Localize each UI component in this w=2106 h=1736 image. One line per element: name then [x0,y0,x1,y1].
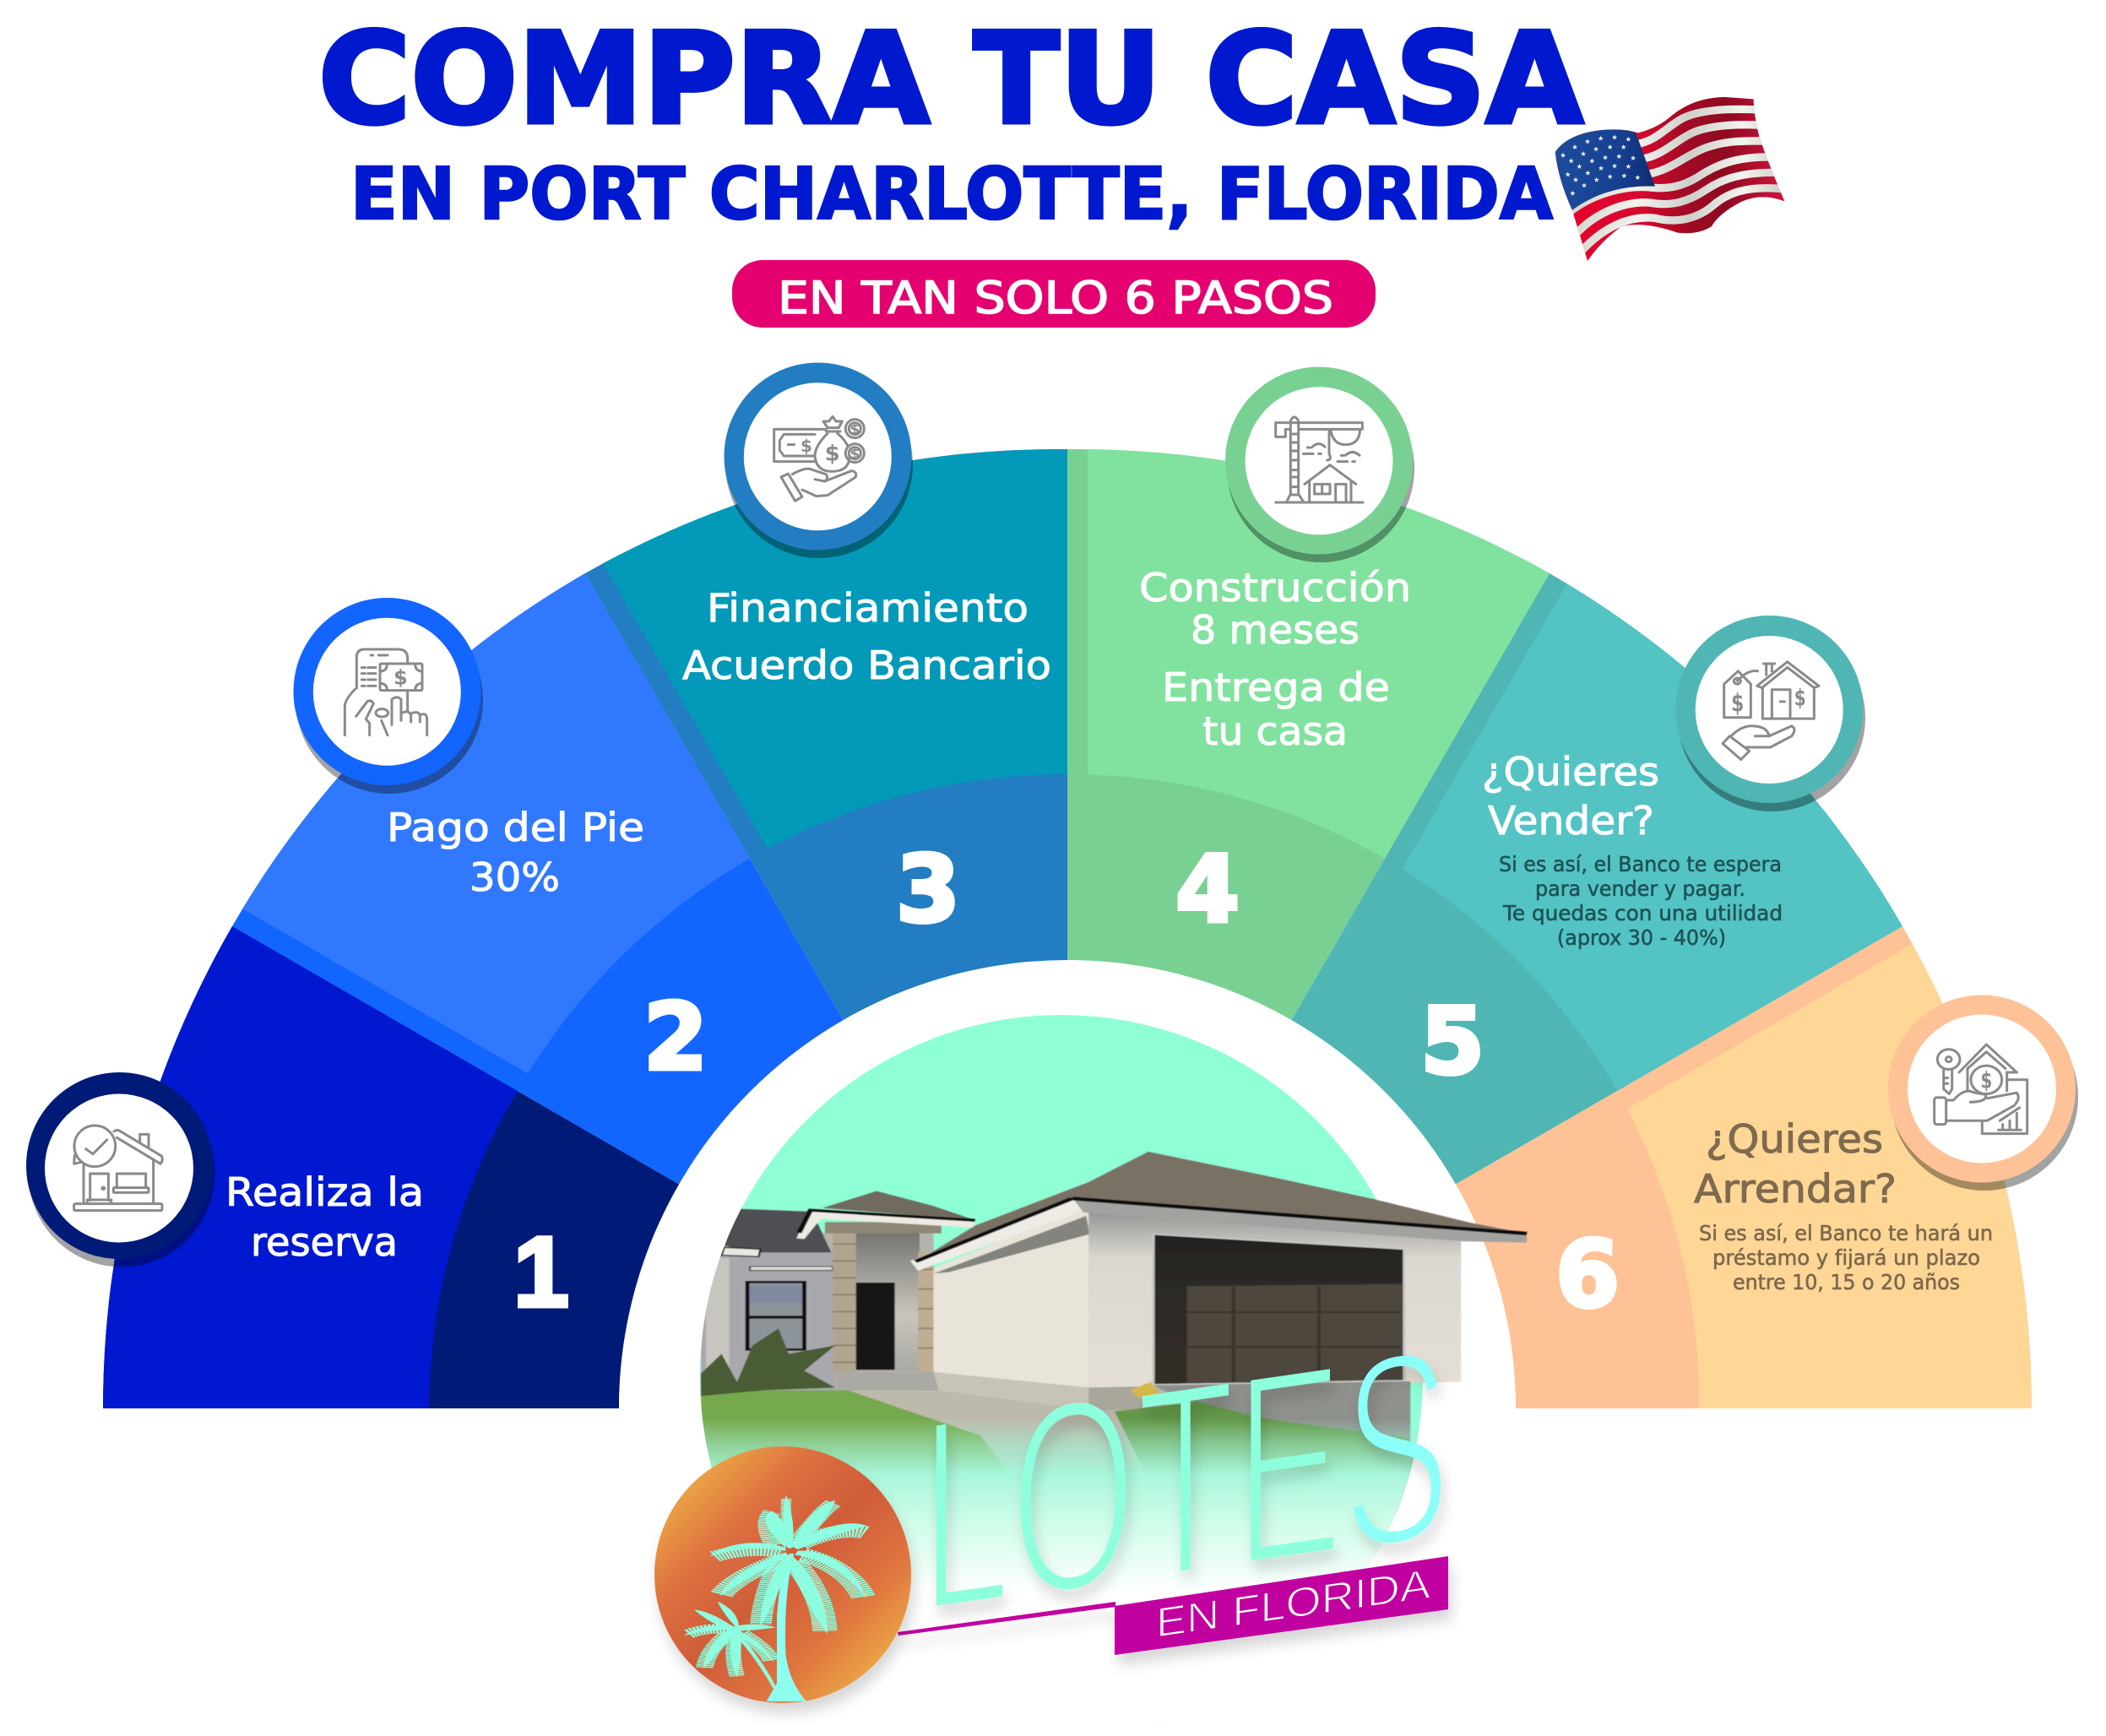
stone column [833,1230,856,1374]
logo: lotes en florida [898,1356,1457,1668]
icon badge 3: money in hand: $ [850,421,860,437]
driveway [851,1390,1118,1424]
text: quieres arrendar: ¿Quieres [1706,1116,1883,1162]
text: quieres vender: ¿Quieres [1482,749,1659,795]
text: construccion: 8 meses [1191,607,1360,653]
badge: en tan solo 6 pasos: EN TAN SOLO 6 PASOS [778,273,1333,324]
gravel [1153,1381,1410,1446]
grass [701,1390,1004,1468]
entry steps [836,1372,940,1392]
text: realiza la reserva: Realiza la [225,1169,424,1215]
fade overlay [692,1419,1436,1736]
step 3 panel [603,449,1067,849]
text: financiamiento [682,585,1051,688]
logo: palm circle [654,1446,911,1703]
garage door [1153,1234,1404,1385]
house backing [722,1233,1167,1417]
icon badge 4: crane and house [1225,366,1414,562]
number 2: 2 [643,984,708,1091]
text: quieres vender: Te quedas con una utilidad [1502,901,1783,925]
corner wall [1088,1207,1461,1387]
step 2 panel [242,573,750,1073]
plinth [934,1372,1088,1407]
text: quieres arrendar: préstamo y fijará un plazo [1712,1245,1980,1270]
magenta band [1115,1556,1448,1655]
icon badge 3: money in hand: $ [801,436,812,456]
icon badge 6: rent key house [1888,995,2078,1191]
icon badge 6: rent key house: $ [1980,1067,1992,1093]
text: construccion: Entrega de [1162,665,1390,710]
icon badge 5: sell house: $ [1731,689,1744,718]
text: quieres arrendar: Si es así, el Banco te hará un [1699,1221,1993,1245]
magenta line [898,1602,1115,1636]
text: construccion: Construcción [1139,565,1411,610]
white ring behind house [619,963,1516,1408]
icon badge 3: money in hand: $ [850,446,860,462]
step 2 band [232,573,843,1184]
text: quieres vender: Vender? [1488,798,1654,844]
title: compra tu casa: COMPRA TU CASA [318,7,1583,153]
step 6 band [1456,926,2032,1408]
door [856,1283,895,1370]
main fascia [910,1197,1086,1271]
window [747,1282,804,1349]
main left wall [934,1205,1088,1387]
left fascia [721,1247,760,1256]
step 4 panel [1088,449,1550,859]
mint circle behind house [700,1015,1423,1736]
number 5: 5 [1420,988,1485,1095]
text: pago del pie [387,805,644,900]
number 1: 1 [513,1217,569,1328]
text: quieres arrendar: entre 10, 15 o 20 años [1733,1270,1960,1294]
icon badge 3: money in hand [725,363,913,558]
text: construccion: tu casa [1202,708,1348,754]
text: quieres vender: para vender y pagar. [1535,876,1745,901]
palm trunks [767,1554,806,1701]
palm frond combs [689,1499,865,1676]
bushes [701,1328,835,1396]
number 4: 4 [1175,836,1240,943]
icon badge 3: money in hand: $ [825,442,840,467]
main roof [915,1152,1527,1262]
text: quieres arrendar [1694,1116,1993,1294]
number 6: 6 [1555,1221,1620,1328]
entrance roof [822,1191,975,1220]
step 1 panel [103,926,518,1408]
text: pago del pie: 30% [470,854,560,900]
step 1 band [103,926,679,1408]
text: pago del pie: Pago del Pie [387,805,644,850]
text: quieres arrendar: Arrendar? [1694,1166,1897,1212]
text: quieres vender [1482,749,1783,950]
wordmark: lotes: LOTES [920,1288,1451,1672]
entrance eave [796,1210,975,1239]
image: house illustration [701,1152,1527,1514]
text: realiza la reserva [225,1169,424,1265]
left dark roof [725,1208,832,1253]
palm fronds [684,1495,867,1678]
number 3: 3 [896,836,960,943]
text: realiza la reserva: reserva [251,1219,398,1265]
step 4 band [1067,449,1550,1020]
step 6 panel [1627,944,2032,1408]
icon badge 5: sell house: $ [1794,684,1806,711]
icon badge 2: phone payment [294,598,483,794]
subtitle: en port charlotte, florida: EN PORT CHARLOTTE, FLORIDA [350,153,1553,236]
text: financiamiento: Financiamiento [707,585,1029,631]
icon badge 5: sell house [1675,616,1865,811]
step 3 band [585,449,1067,1020]
chart: semicircle of six steps [103,449,2032,1408]
text: quieres vender: (aprox 30 - 40%) [1557,925,1726,950]
icon badge 1: house with check [26,1072,214,1267]
left wall [701,1252,835,1393]
badge: en tan solo 6 pasos [732,260,1376,328]
entrance wall [855,1230,920,1370]
wordmark: en florida: EN FLORIDA [1156,1560,1430,1646]
text: financiamiento: Acuerdo Bancario [682,643,1051,688]
step 5 band [1292,573,1902,1184]
icon badge 2: phone payment: $ [394,666,408,690]
text: construccion [1139,565,1411,754]
text: quieres vender: Si es así, el Banco te espera [1499,852,1782,876]
step 5 panel [1403,583,1902,1091]
icon: american flag [1555,97,1785,261]
